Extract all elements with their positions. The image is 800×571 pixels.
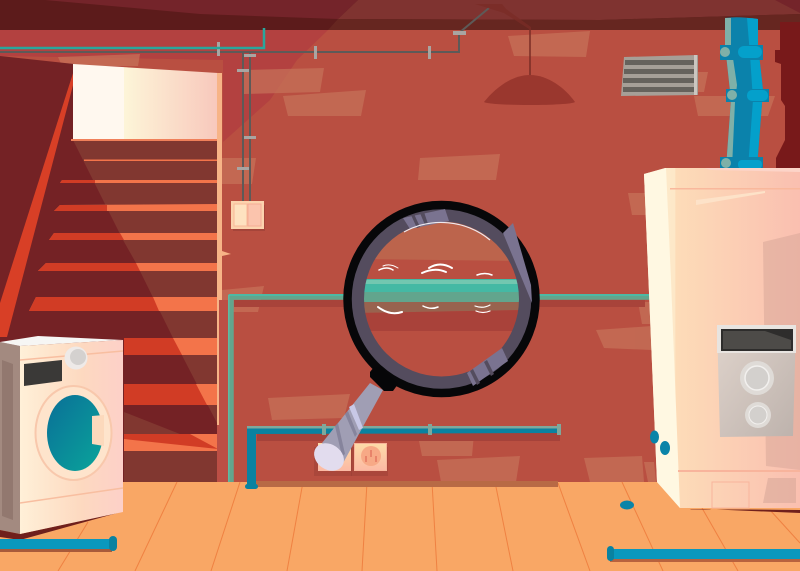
dial [64,346,88,370]
ceiling [0,0,800,30]
door ring [36,386,112,480]
floor pipe right [607,546,800,562]
water heater boiler [644,168,800,513]
staircase [0,56,218,482]
display [24,360,62,386]
steps [29,160,218,451]
wall sockets [314,443,388,476]
boiler valves [620,430,670,510]
doorway light [73,64,218,139]
teal wall pipe with water [228,294,650,484]
drum [47,395,103,471]
bezel highlights [403,209,449,229]
bezel [358,215,526,383]
blue vertical pipe [720,17,769,169]
grey conduit pipes [0,8,489,202]
teal pipe top [0,28,264,48]
lens magnified view [364,222,519,331]
air vent [621,55,698,96]
floor pipe left [0,536,117,552]
floor [0,481,800,571]
washing machine [0,336,123,540]
handle [309,383,383,476]
grip [370,367,398,391]
light switch [231,201,265,231]
handrail [0,70,77,337]
blue pipe along wall [245,424,561,489]
door frame [217,73,231,483]
water drops [378,264,492,313]
hanging lamp [475,4,575,105]
dark wall panel right [775,22,800,168]
wall bricks [58,31,775,482]
magnifying glass [309,205,536,476]
control panel [717,325,796,437]
